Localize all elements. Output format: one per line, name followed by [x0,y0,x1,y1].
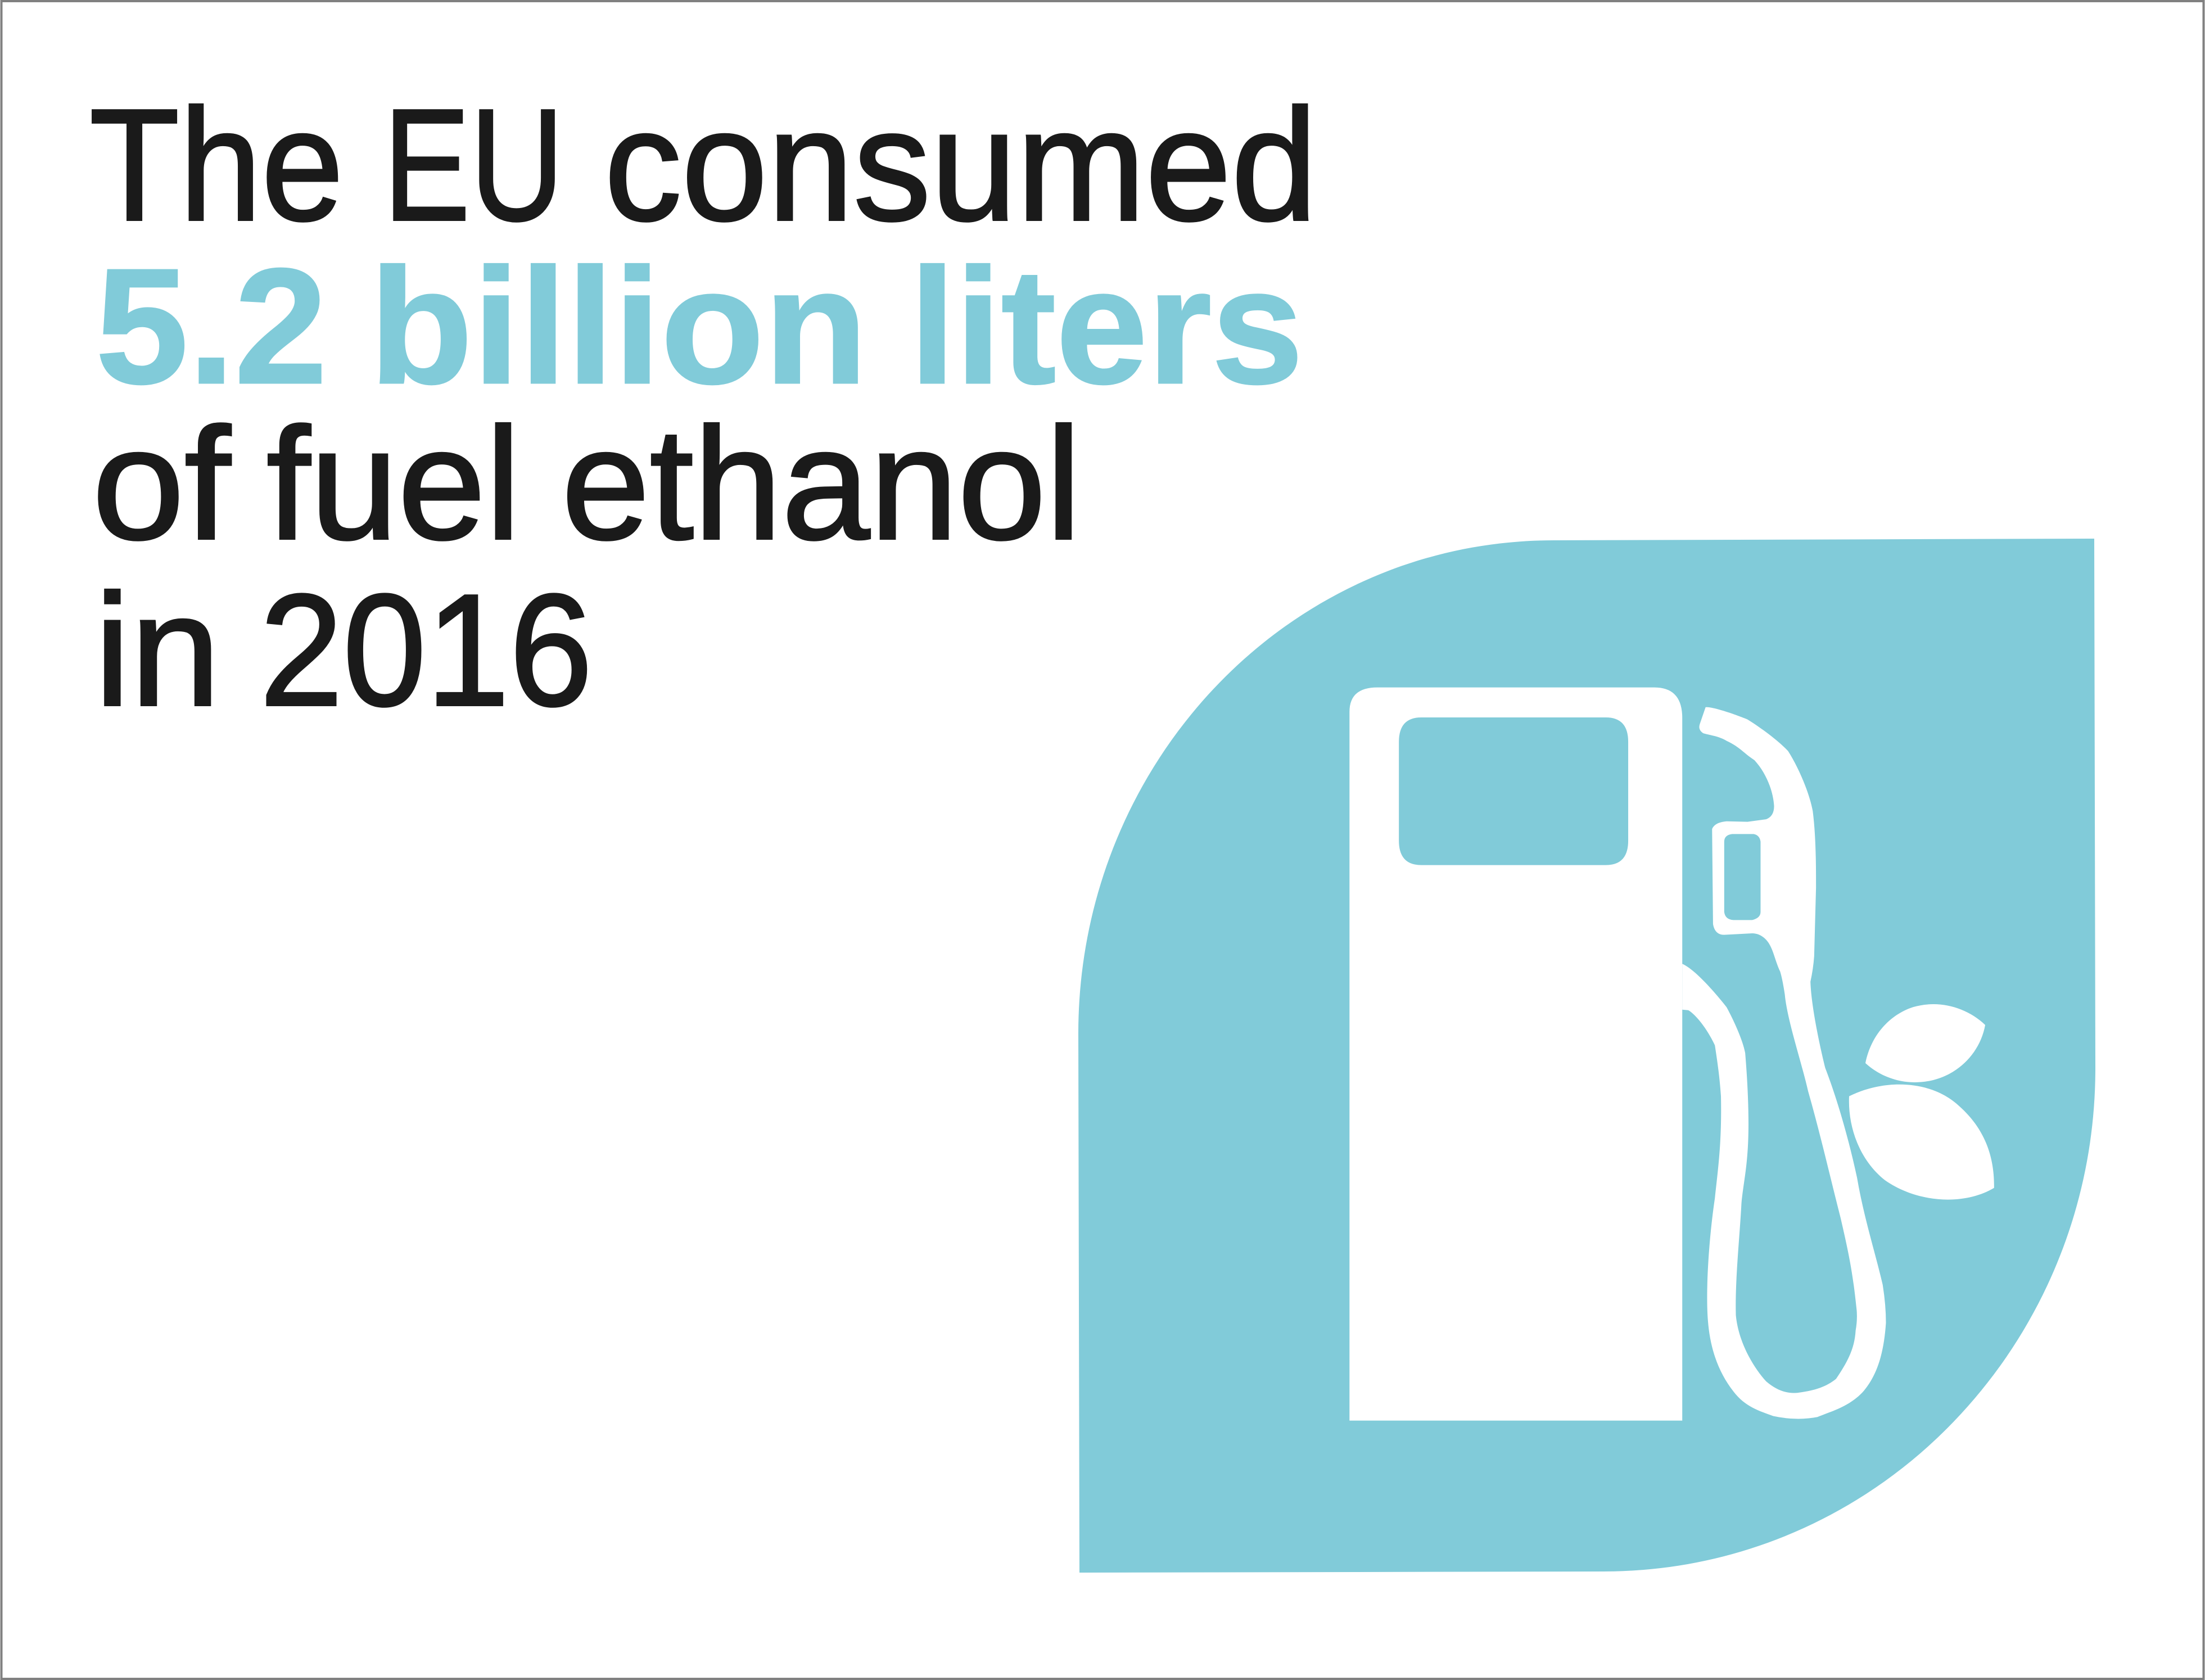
icon: pump body with display window [1349,688,1682,1421]
icon: hose and nozzle [1682,707,1886,1419]
heading line 2: 5.2 billion liters: 5.2 [96,234,327,418]
heading line 4: in 2016 [94,561,593,739]
icon: lower leaf [1849,1085,1994,1200]
heading line 1: The EU consumed [89,76,1317,254]
leaf-shaped blue panel [1078,539,2095,1573]
heading line 3: of fuel ethanol: ethanol [562,395,1081,572]
heading line 4: in 2016: in [94,561,220,739]
heading line 4: in 2016: 2016 [260,561,593,739]
icon: fuel pump with biofuel leaves [1349,688,1994,1421]
heading line 3: of fuel ethanol [92,395,1081,572]
heading line 1: The EU consumed: EU [383,76,564,254]
icon: upper leaf [1865,1004,1985,1082]
heading line 3: of fuel ethanol: fuel [266,395,521,572]
heading line 1: The EU consumed: The [89,76,344,254]
heading line 2: 5.2 billion liters: liters [910,234,1303,418]
heading line 3: of fuel ethanol: of [92,395,231,572]
heading line 1: The EU consumed: consumed [604,76,1317,254]
heading [89,76,1317,739]
heading line 2: 5.2 billion liters [96,234,1303,418]
heading line 2: 5.2 billion liters: billion [369,234,867,418]
